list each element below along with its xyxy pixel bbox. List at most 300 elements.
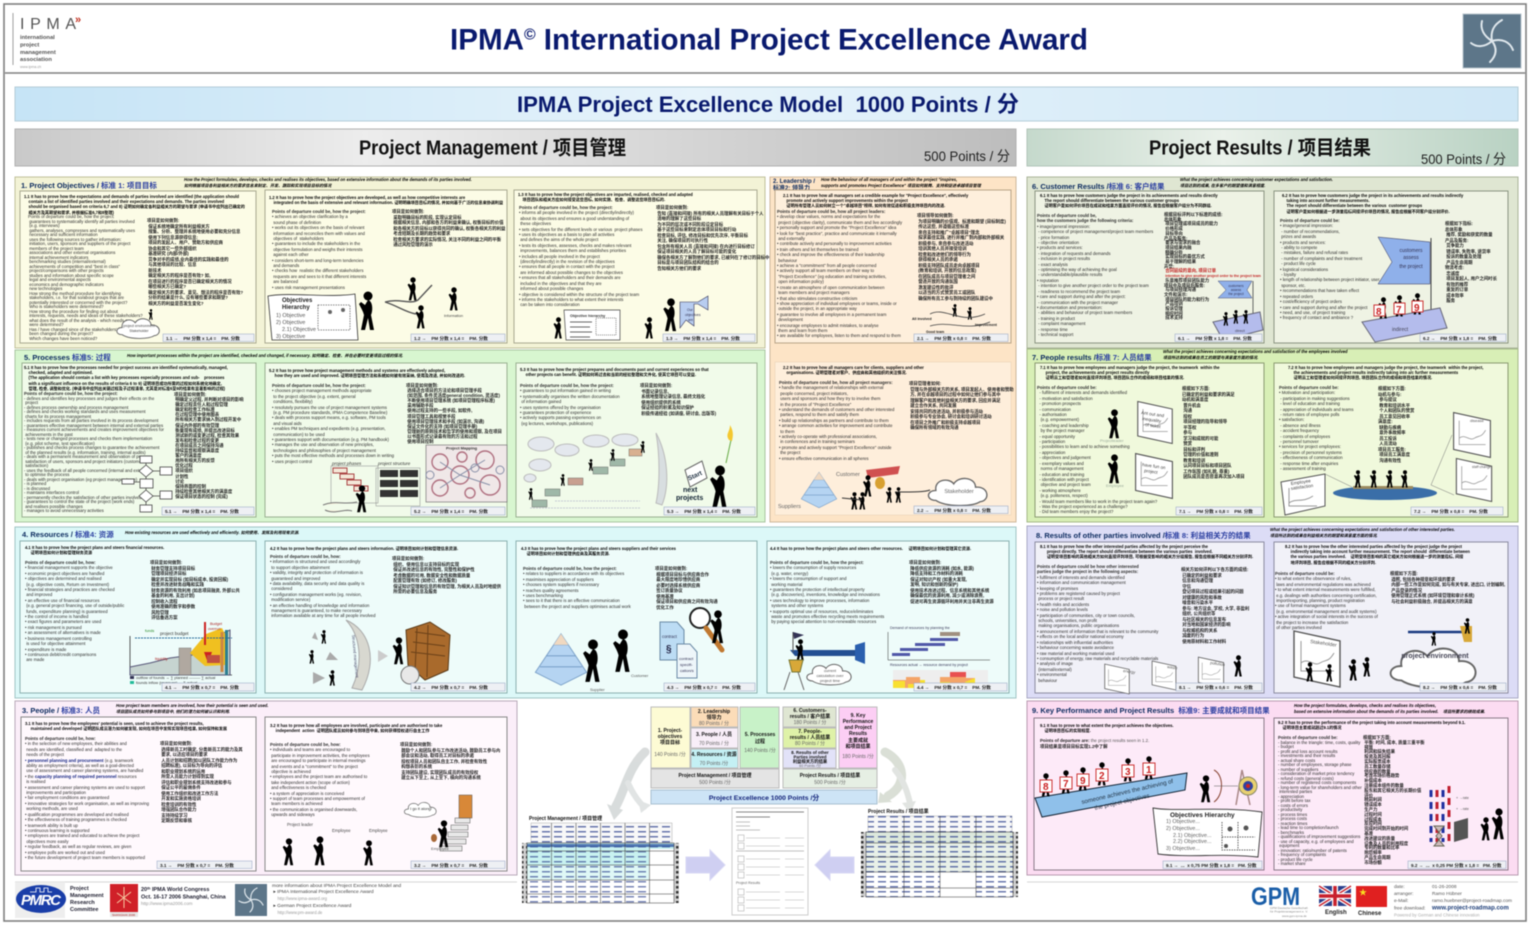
points tag 3.1 bbox=[157, 861, 252, 869]
english points 8.1: Points of departure could be how other interested parties judge the project in the following aspects: • fulfilment of interests and demands identified • information and communication management • keeping of promises • problems are registered caused by project process or project result • health risks and accidents • noise and pollution levels • participation of communities, city or town councils, schools, universities, non profit making organisations, public organisations • announcement of information that is relevant to the community • effects on the local and/or national economy • relationships with influential authorities • behaviour concerning waste avoidance • raw material and working material used • consumption of energy, raw materials and recyclable materials • analysis of image (internal/external) • environmental behaviour bbox=[1037, 564, 1158, 683]
section heading: project management bbox=[15, 129, 1016, 166]
panel: 8 other parties results bbox=[1027, 526, 1518, 698]
panel: 4 resources: 4. Resources / 标准4: 资源 bbox=[22, 529, 114, 539]
points tag 5.1: 5.1 → PM 分数 x 1,4 = PM. 分数 bbox=[165, 508, 239, 515]
illustration: project phases and mind map: project phases bbox=[331, 461, 362, 466]
tile 9 key performance: 和项目结果 bbox=[845, 743, 871, 750]
intro text 8: What the project achieves concerning expectations and satisfaction of other interested parties. 项目所达到的成果在利益相关方的期望和满意度方面的情况. bbox=[1270, 527, 1455, 538]
tile 5 processes bbox=[740, 707, 779, 768]
illustration: handshake, pyramid, contract, magnifier bbox=[535, 608, 723, 692]
chinese points 2.2: 项目管理者如何: 管理与外部相关方的关系, 项目发起人、使用者和赞助 方, 并在卓越项目的过程中如何让他们参与其中 理解客户和其他利益相关方的要求, 回应并满足 建立合作关系, 共同发展 安排共同的改进活动, 并积极参与活动 积极参与专业协会, 研讨会和培训研讨活动 在项目之外推广和积极支持卓越项目 确保所有领域的有效沟通 bbox=[909, 381, 1014, 430]
chinese points 8.2: 根据如下方面: 遵照, 包括各种规章和环境的要求 内部一些工作是如何完成, 如与有关专家, 进出口, 计划编制, 产品登录的情况 使用管理正式系统 (如环境管理和审计系统) 与社会利益积极融合, 并提高相关方的满意 bbox=[1390, 571, 1505, 604]
illustration: boards and rowing team: disease bbox=[1470, 418, 1485, 423]
illustration: customer flag on podium: customers bbox=[1228, 284, 1244, 288]
criterion heading 3.2: 3.2 It has to prove how all employees are involved, participate and are authorised to take independent action 证明团队成员如何参与到项目中来, 如何获得授权进行自主工作 bbox=[270, 723, 442, 733]
logo: PMRC: Management bbox=[70, 893, 104, 899]
logo: IPMA world congress: th bbox=[147, 886, 150, 890]
box 3.2 bbox=[265, 717, 507, 871]
illustration: objectives hierarchy and figures: 2) Objective bbox=[276, 320, 305, 326]
IPMA logo: international bbox=[20, 35, 55, 41]
scoring sheet bbox=[732, 808, 808, 915]
illustration: leadership network: Improvement bbox=[975, 323, 998, 327]
tile 3 people: 70 Points / 分 bbox=[699, 740, 729, 747]
section heading: project results bbox=[1027, 129, 1518, 167]
illustration: next projects, lessons learned: Start bbox=[687, 470, 704, 482]
english points 4.1: Points of departure could be, how: • financial management supports the objective • economic project objectives are handled • objectives are determined and realised (e.g. objective costs, Return on Investment) • financial strategies and practices are checked and improved • an effective use of financial resources (e.g. general project financing, use of outside/public funds, expenditure planning) is guaranteed • the control of income is handled • exact figures and parameters are used • risk management is pursued • an assessment of alternatives is made • business management controlling is used for objective attainment • expenditure is made • continuous debit/credit comparisons are made bbox=[25, 560, 124, 662]
illustration: archer and target bbox=[1200, 770, 1257, 805]
tile 7 people results: 80 Points / 分 bbox=[795, 740, 825, 747]
illustration: customer flag on podium bbox=[1213, 281, 1263, 340]
flag: China: ★ bbox=[1359, 888, 1367, 897]
IPMA logo bbox=[13, 13, 81, 69]
chinese points 9.2: 根据如下方面: 平衡: 时间, 成本, 质量三重平衡 预算 利润和损失结果 投资及其回报 实际股票成本 员工数量存储 供应商的数量 考虑市场价格趋势 补偿成本 注册成本组件的数量 股东和其它相关方的长期价值 评价 税前利润 错误成本 生产力 过程时间 过程成本 反应时间 完成时间到开始的时间 基准 改进建议的质量 设备及人员的利用程度 专利的数量和比率 抱怨频率 产品生命周期 市场份额 bbox=[1363, 735, 1424, 865]
english points 3.1: Points of departure could be, how: • in the selection of new employees, their abilities and needs are identified, classified and adapted to the needs of the project • personnel planning and procurement (e.g. teamwork ability as employment criteria), as well as a goal-directed use of assessment and career planning systems, are handled • the capacity planning of required personnel resources is realised • assessment and career planning systems are used to support improvements and participation • fair employment conditions are guaranteed • innovative strategies for work organisation, as well as improving working methods, are used • qualification programmes are developed and realised • the effectiveness of training programmes is checked • teamwork ability is built up • continuous learning is supported • employees are trained and educated to achieve the project objectives more easily • regular feedback, as well as regular reviews, are given • employee polls are worked out and used • the future development of project team members is supported bbox=[25, 736, 149, 860]
logo: GPM: GPM Deutsche Gesellschaft bbox=[1270, 906, 1308, 910]
box 5.1 bbox=[22, 363, 256, 517]
criterion heading 5.2: 5.2 It has to prove how project management methods and systems are effectively adopted, how they are used and improved. 证明项目管理方法和系统如何被有效采纳, 使用及改进, 并如何改进的. bbox=[269, 368, 465, 378]
points tag 4.3: 4.3 → PM 分数 x 0,7 = PM. 分数 bbox=[667, 684, 741, 691]
tile 4 resources: 70 Points /分 bbox=[700, 760, 728, 767]
illustration: boards and managers: of ticket bbox=[1145, 422, 1162, 429]
illustration: budget chart: overrun bbox=[208, 627, 221, 631]
illustration: indirect flag on podium: customers bbox=[1399, 248, 1423, 254]
chinese points 7.2: 根据如下方面: 动机与参与: 参与提议 教育和培训水平 个人和团队的赞赏 员工意见回收率 满意度: 缺勤与疾病 意外事故频率 员工投诉 人员流动 项目员工服务: 项目员工满意度 沟通有效性 bbox=[1378, 386, 1414, 462]
criterion heading 4.1: 4.1 It has to prove how the project plans and steers financial resources. 证明项目如何计划和管理财务资源 bbox=[25, 545, 164, 555]
points tag 3.2 bbox=[411, 861, 505, 869]
illustration: stakeholder board and project environment cloud: Stakeholder bbox=[1310, 639, 1337, 649]
tile 3 people bbox=[691, 728, 738, 748]
table: project results bbox=[861, 808, 1018, 897]
english points 9.2: Points of departure could be: - balance in the triangle: time, costs, quality - budget - profit and loss account results - investments and their results - actual share costs - number of employees, storage phase - number of suppliers - consideration of market price tendency - refund costs (general costs) - number of registered costs components - long-term value for shareholders and other interested parties - appreciation - profit before tax - costs of errors - productivity - process times - process costs - reaction times - lead time to completion/launch - benchmarks - qualifications of improvement suggestions - use of capacity, e.g. of employees and equipment - innovation: ratio/number of patents - frequency of complaints - product life cycle - market share bbox=[1278, 735, 1362, 866]
illustration: boards and rowing team bbox=[1281, 413, 1492, 515]
criterion heading 5.1: 5.1 It has to prove how the processes needed for project success are identified systematically, managed, checked, adapted and optimised. (The application should contain a list with key processes especially processes and sub- processes with a significant influence on the results of criteria 6 to 9) 证明项目成功所需的过程如何系统化地确定, 管理, 检查, 调整和优化. (申请书中应列出关键过程及子过程清单, 尤其是对标准6至9的结果有显著影响的过程) bbox=[24, 365, 228, 391]
points tag 8.1: 8.1 → PM 分数 x 0,6 = PM. 分数 bbox=[1179, 684, 1253, 691]
logo: IPMA world congress: http://www.ipma2006.com bbox=[141, 901, 193, 906]
points tag 7.2: 7.2 → PM 分数 x 0,8 = PM. 分数 bbox=[1414, 508, 1488, 515]
chinese points 4.2: 项目是如何做到: 组织、使用信息以支持目标的实现 保证并改进信息的有效性, 完整性和保护性 考虑数据的可用, 数据安全性和数据质量 配置管理有效 (如修订, 修改服务) 保证知识管理和信息的有效管理, 为相关人员及时地提供 所需的必要信息及服务 bbox=[392, 556, 501, 594]
tile 2 leadership: 领导力 bbox=[706, 714, 722, 721]
illustration: project environment cloud: Stakeholder bbox=[129, 329, 149, 333]
illustration: next projects, lessons learned bbox=[524, 425, 733, 508]
illustration: stacked bars, hourglass, figures: + →rate bbox=[1456, 796, 1469, 800]
illustration: objectives hierarchy sheet: 2) Objective... bbox=[1166, 826, 1200, 832]
tile 6 customers bbox=[783, 707, 836, 727]
english points 8.2: Points of departure could be: • to what extent the observance of rules, laws and environmental regulations was achieved • to what extent internal measurements were fulfilled, e.g. dealings with authorities concerning certification, import/exporting, planning, product registration • use of formal management systems (e.g. environmental management and audit systems) • active integration of social interests in the success of the project to increase the satisfaction of other parties involved bbox=[1275, 571, 1378, 630]
chinese points 3.2: 项目是如何做到: 鼓励个人和团队参与工作改进活动, 鼓励员工参与内 部会议和活动, 取得员工对目标的承诺 授权项目人员和团队自主工作, 并检查有效性 构想表彰的系统 支持团队建设, 实现团队成员的有效授权 建立从下至上, 从上至下, 横向的沟通系统 bbox=[400, 742, 500, 780]
illustration: project environment cloud: project environment bbox=[123, 324, 155, 328]
box 1.2 bbox=[265, 190, 507, 343]
tile 8 other parties: Parties involved bbox=[794, 754, 827, 760]
tile 8 other parties: 利益相关方的结果 bbox=[793, 758, 828, 765]
box 4.3 bbox=[516, 541, 757, 693]
bar project results: Project Results / 项目结果 bbox=[800, 772, 860, 779]
footer credits: 01-26-2008 bbox=[1432, 884, 1457, 890]
illustration: indirect flag on podium: 8 bbox=[1376, 307, 1382, 318]
footer links text: more information about IPMA Project Excellence Model and ▸ IPMA International Project Excellence Award http://www.ipma-award.org ▸ German Project Excellence Award http://www.pm-award.de bbox=[272, 884, 401, 915]
chinese points 4.1: 项目是如何做到: 财务管理支持项目目标 管理项目经济目标 确定并实现目标 (如目标成本, 投资回报) 检查并改进财务战略和实践 财务资源的有效利用 (如总项目融资, 外部公共 基金的利用, 支出计划) 控制收入流程 使用准确的数字和参数 风险管理 评估备选方案 bbox=[150, 560, 240, 620]
points tag 4.2: 4.2 → PM 分数 x 0,7 = PM. 分数 bbox=[414, 684, 488, 691]
illustration: small boards: waste bbox=[1167, 664, 1179, 671]
points tag 6.1: 6.1 → PM 分数 x 1,8 = PM. 分数 bbox=[1178, 335, 1252, 342]
chinese points 1.2: 项目是如何做到: 采取明确目标的阶段, 实现认定目标 根据相关信息, 内部和各方的利益来确认, 权衡目标的价值 和各相关方的目标以获得共同的确认, 权衡各相关方的利益 考虑短期及长期的趋势和要求 检查相关方要求的实际情况, 关注不同的利益之间的平衡 通过风险管理的演示 bbox=[392, 209, 505, 247]
tile 9 key performance bbox=[839, 707, 877, 768]
tile 9 key performance: Results bbox=[849, 731, 867, 737]
box 1.3 bbox=[514, 190, 757, 343]
tile 8 other parties: 8. Results of other bbox=[791, 750, 829, 755]
points tag 3.1: 3.1 → PM 分数 x 0,7 = PM. 分数 bbox=[160, 862, 234, 869]
illustration: indirect flag on podium: indirect bbox=[1392, 327, 1409, 333]
tile 5 processes: 5. Processes bbox=[745, 732, 776, 738]
chinese points 3.1: 项目是如何做到: 选择新员工时确定, 分类新员工的能力及其 要求, 以适应项目的要求 人员计划和招聘(如以团队工作能力作为 招聘标准), 以目标为导向的评估 和职业规划系统的运用 所需人员能力计划得到实现 评估和职业规划系统支持改进和参与 保证公平的雇佣条件 使用工作组织和改进工作方法 开发和实施资格培训 检查培训的有效性 增强团队合作能力 支持持续学习 定期反馈和审核 bbox=[160, 741, 243, 823]
logo: PMRC: Research bbox=[70, 900, 95, 906]
intro text 7: What the project achieves concerning expectations and satisfaction of the employees involved 项目所达到的成果在员工的期望与满意度方面的情况. bbox=[1163, 349, 1348, 360]
chinese points 5.1: 项目是如何做到: 明确定义过程, 并判断对项目的影响 确定过程责任人和过程管理 确定和检查工作标准 在过程管理中使用图表 所有相关方要求纳入到过程开发中 保证内外部的有效管理 衡量现有成绩, 并提出改进目标 测试新的或变更过程, 检查其效果 发布和检查过程的变更 在项目成员之间保持沟通 持续监督和观察满意度 客户的满意度 用所有相关方的反馈 优化过程 项目组织 计划性 讨论 保持界面的控制 持续检查其他相关方的满意度 保证项目状态的控制 (完成) bbox=[174, 392, 244, 499]
illustration: budget chart: outflow of founds → ∑ planned ——— ∑ actual bbox=[136, 676, 215, 680]
tile 7 people results: results / 人员结果 bbox=[790, 734, 830, 741]
illustration: boards and managers bbox=[1100, 402, 1172, 498]
illustration: archer, document and flag: Objective hierarchy bbox=[570, 314, 606, 318]
logo: PMRC: Project bbox=[70, 886, 89, 892]
points tag 6.2: 6.2 → PM 分数 x 1,8 = PM. 分数 bbox=[1423, 335, 1497, 342]
criterion heading 6.1: 6.1 It has to prove how customers judge the project in its achievements and results directly The report should differentiate between the various customer groups 证明客户是如何评价项目在成就和结果方面直接评价的情况, 报告应根据客户组分为不同群组. bbox=[1040, 193, 1218, 208]
english points 1.3: Points of departure could be, how the project: • informs all people involved in the project (directly/indirectly) about its objectives and ensures a good understanding of these objectives • sets objectives for the different levels or various project phases • uses its objectives as a basis to plan all activities and defines the aims of the whole project • tests its objectives, assesses, checks and makes relevant improvements, balances them and establishes priorities • includes all people involved in the project (directly/indirectly) in the revision of the objectives • ensures that all people in contact with the project are informed about possible changes to the objectives • ensures that all stakeholders and their demands are included in the objectives and that they are informed about possible changes • objective is considered within the structure of the project team • informs the stakeholders to what extent their interests can be taken into consideration bbox=[519, 205, 642, 307]
illustration: objectives hierarchy and figures bbox=[268, 277, 463, 340]
illustration: objectives hierarchy sheet: 2.1) Objective... bbox=[1173, 833, 1212, 839]
illustration: telescope and resource chart: calculation over bbox=[816, 673, 844, 678]
english points 4.4: Points of departure could be, how the project: • lowers the consumption of supply resources (e.g. water, energy) • lowers the consumption of support and working material • guarantees the protection of intellectual property (e.g. discoveries), inventions, knowledge and innovations • uses technology to improve processes, information systems and other systems • supports optimal use of resources, reduce/eliminates waste and promotes effective recycling meets requirements by paying special attention to non-renewable resources bbox=[770, 560, 884, 624]
logo: PMRC: Committee bbox=[70, 907, 98, 913]
criterion heading 9.1: 9.1 It has to prove to what extent the project achieves the objectives. 证明项目目标的实现程度. bbox=[1040, 723, 1174, 733]
chinese points 5.2: 项目是如何做到: 选择适合项目的方法论和项目管理手段 (如范围, 条件灵活度general condition, 灵活度) 不断使用项目管理系统 (如项目管理程序标准) 采用辅助手段 使用过程支持的一些手段, 如软件, 项目管理工具和视觉手段 使用项目管理技术和手段 (如演示, 沟通) 保证文件化的支持 (如项目管理手册) 管理新的原则技术和哲学的使用和观察, 及在项目 以书面形式记录最有效的方法和过程 使用项目控制 bbox=[406, 383, 502, 444]
footer credits: e-Mail: bbox=[1394, 898, 1408, 904]
illustration: relay runners and stairs: Project leader bbox=[287, 822, 313, 827]
footer credits: date: bbox=[1394, 884, 1405, 890]
points tag 7.2 bbox=[1411, 507, 1503, 515]
chinese points 2.1: 项目领导如何做到: 为项目明确的价值观、标准和期望 (目标制度) 传达这些, 并遵循这些标准 亲自支持和推广"卓越项目"理念 探求最佳实践, 进行并推广到内部和外部相关 积极参与, 亲自参与改进活动 培训其他人员并接受培训 检查和改进他们的领导行为 获得相关人员的承诺 积极支持团队成员走向卓越项目 (教育和培训, 开放的信息政策) 在团队成员与项目管理者之间 营造开放的沟通氛围 激发建设性的批评 以适当的方式赞赏员工或团队 确保所有员工参与到持续的团队建设中 bbox=[917, 213, 1006, 300]
chinese points 8.1: 相关方如何评判以下各方面的成绩: 已确定的利益和要求 信息和沟通管理 守信 登记项目过程或结果引起的问题 对健康的风险和事故 噪音和污染水平 参与: 地方议会, 学校, 大学, 非盈利 组织, 公共组织等 与社区相关的信息发布 对当地和国家经济的影响 与权威机构的关系 减废的行为 使用原材料和工作材料 bbox=[1181, 567, 1249, 644]
footer credits bbox=[1394, 884, 1512, 918]
tile 9 key performance: and Project bbox=[844, 725, 872, 731]
box 7.1 bbox=[1035, 363, 1264, 517]
flag: China bbox=[1356, 886, 1387, 917]
illustration: objectives hierarchy sheet: 2.2) Objective... bbox=[1173, 839, 1212, 845]
illustration: budget chart bbox=[130, 622, 232, 685]
criterion heading 3.1: 3.1 It has to prove how the employees' potential is seen, used to achieve the project results, maintained and developed 证明团队成员潜力如何被发现, 如何在项目中发挥实现项目结果, 如何保持和发展 bbox=[25, 721, 227, 731]
bar project excellence: Project Excellence 1000 Points /分 bbox=[709, 793, 819, 802]
illustration: customer flag on podium: the project bbox=[1228, 292, 1244, 296]
illustration: boards and managers: Employee bbox=[1106, 483, 1125, 488]
panel: 3 people bbox=[15, 701, 517, 875]
tile 2 leadership bbox=[691, 707, 738, 727]
points tag 8.2: 8.2 → PM 分数 x 0,6 = PM. 分数 bbox=[1423, 684, 1497, 691]
tile 1 project objectives: 1. Project- bbox=[658, 728, 682, 734]
footer rule left bbox=[15, 881, 1518, 883]
illustration: project phases and mind map: project structure bbox=[377, 461, 411, 466]
tile 1 project objectives: objectives bbox=[658, 734, 682, 740]
box 9.1 bbox=[1034, 718, 1264, 870]
icon: award spiral small bbox=[235, 884, 267, 916]
flag: United Kingdom: English bbox=[1325, 910, 1347, 916]
logo: IPMA world congress: IPMA World Congress bbox=[150, 887, 209, 893]
points tag 5.2: 5.2 → PM 分数 x 1,4 = PM. 分数 bbox=[414, 508, 488, 515]
logo: PMRC: PMRC bbox=[21, 892, 62, 909]
banner: model 1000 points bbox=[15, 87, 1518, 121]
illustration: relay runners and stairs: Employee bbox=[332, 828, 351, 833]
illustration: handshake, pyramid, contract, magnifier: specifi- bbox=[680, 662, 693, 667]
tile 4 resources: 4. Resources / 资源 bbox=[691, 751, 737, 758]
points tag 9.1: 9.1 → ... x 0,75 PM 分数 x 1,8 = PM. 分数 bbox=[1166, 862, 1257, 869]
IPMA logo: association bbox=[20, 57, 52, 63]
points tag 8.2 bbox=[1420, 683, 1506, 691]
box 4.2 bbox=[265, 541, 507, 693]
illustration: indirect flag on podium: assess bbox=[1403, 255, 1419, 261]
tile 3 people: 3. People / 人员 bbox=[696, 731, 732, 738]
points tag 5.1 bbox=[162, 507, 254, 515]
logo: IPMA world congress: SHANGHAI 2006 bbox=[112, 913, 136, 917]
illustration: blue bar with numbered figures: 3 bbox=[1125, 767, 1131, 778]
tile 6 customers: 180 Points / 分 bbox=[794, 719, 826, 726]
points tag 4.1: 4.1 → PM 分数 x 0,7 = PM. 分数 bbox=[165, 684, 239, 691]
illustration: blue bar with numbered figures: 8 bbox=[1043, 782, 1049, 793]
table: project management: Project Management / 项目管理 bbox=[529, 815, 602, 822]
intro text 5: How important processes within the project are identified, checked and changed, if necessary. 如何确定、检查、并在必要时变更项目过程的情况. bbox=[127, 353, 403, 358]
illustration: boards and managers: project bbox=[1144, 468, 1159, 475]
points tag 8.1 bbox=[1176, 683, 1262, 691]
points tag 9.1 bbox=[1163, 861, 1262, 869]
intro text 3: How project team members are involved, how their potential is seen and used. 项目团队成员如何参与到项目中, 他们的潜力如何被认识和利用. bbox=[116, 703, 268, 714]
illustration: budget chart: liquidity bbox=[155, 657, 168, 661]
tile 9 key performance: 180 Points /分 bbox=[842, 753, 874, 760]
panel: 4 resources bbox=[15, 527, 1016, 698]
tile 1 project objectives bbox=[651, 707, 690, 768]
illustration: relay runners and stairs: Employee bbox=[369, 828, 388, 833]
illustration: objectives hierarchy sheet: 1) Objective... bbox=[1166, 819, 1200, 825]
english points 7.2: Points of departure could be: • Motivation and participation: - participation in making suggestions - level of education and training - appreciation of individuals and teams - return rates of employee polls • satisfaction: - absence and illness - accident frequency - complaints of employees - personnel turnover • services for project employees: - precision of personnel systems - effectiveness of communication - response time after enquiries - assessment of training bbox=[1279, 385, 1354, 471]
bar project management: 500 Points /分 bbox=[699, 779, 731, 786]
tile 9 key performance: Performance bbox=[843, 719, 873, 725]
illustration: objectives hierarchy and figures: 1) Objective bbox=[276, 313, 305, 319]
intro text 2: How the behaviour of all managers of and within the project "inspires, supports and promotes Project Excellence" 项目如何鼓舞、支持和促进卓越项目管理 bbox=[821, 177, 981, 188]
arrow: right to scoring sheet bbox=[686, 850, 725, 880]
criterion heading 9.2: 9.2 It has to prove the performance of the project taking into account measurements beyond 9.1. 证明项目主要成就超过9.1的情况 bbox=[1278, 720, 1465, 730]
bar project management bbox=[651, 769, 779, 788]
illustration: objectives hierarchy and figures: Hierarchy bbox=[282, 305, 310, 311]
illustration: archer, document and flag: are bbox=[688, 318, 693, 322]
illustration: archer, document and flag bbox=[554, 296, 708, 340]
illustration: handshake, pyramid, contract, magnifier: Customer bbox=[631, 673, 649, 678]
icon: award spiral logo bbox=[1463, 14, 1521, 68]
english points 4.3: Points of departure could be, how the project: • relates to suppliers in accordance with its objectives • maximises appreciation of suppliers • chooses system suppliers if necessary • reaches quality agreements • uses benchmarking • sees to it that there is an effective communication between the project and suppliers optimises actual work bbox=[523, 566, 631, 609]
box 4.4 bbox=[767, 541, 1009, 693]
illustration: suppliers pyramid and stakeholder cloud: Suppliers bbox=[778, 504, 801, 510]
footer credits: arranger: bbox=[1394, 891, 1413, 897]
tile 5 processes: 140 Points /分 bbox=[744, 747, 776, 754]
illustration: boards and managers: Projectleader bbox=[1100, 438, 1124, 443]
illustration: archer, document and flag: objectives bbox=[685, 313, 701, 317]
box 2.1 bbox=[775, 190, 1011, 343]
illustration: leadership network bbox=[912, 304, 998, 334]
illustration: boards and rowing team: satisfaction bbox=[1290, 483, 1314, 491]
tile 1 project objectives: 项目目标 bbox=[660, 739, 680, 746]
illustration: handshake, pyramid, contract, magnifier: contract bbox=[679, 656, 694, 661]
illustration: objectives hierarchy and figures: 3) Objective bbox=[276, 334, 305, 340]
chinese points 4.4: 项目是如何做到: 降低供应资源的消耗 (如水, 能源) 降低支持和工作材料的消耗 保证对知识产权 (如重大发现, 发明, 知识和创新的保护) 使用技术改进过程、信息系统和其他系统 确保最优的资源利用, 减少或消除浪费, 促进可再生资源循环利用并关注非再生资源 bbox=[909, 560, 994, 604]
intro text 9: How the project formulates, develops, checks and realises its objectives, based on extensive information about the demands of its parties involved. 项目所要求的绩效成果. bbox=[1294, 703, 1485, 714]
footer credits: www.project-roadmap.com bbox=[1431, 906, 1509, 912]
tile 6 customers: results / 客户结果 bbox=[790, 713, 830, 720]
flag: China: Chinese bbox=[1358, 911, 1382, 917]
title: International Project Excellence Award bbox=[536, 24, 1088, 56]
box 1.1 bbox=[20, 191, 256, 343]
points tag 4.4: 4.4 → PM 分数 x 0,7 = PM. 分数 bbox=[917, 684, 991, 691]
illustration: blue bar with numbered figures: 1 bbox=[1146, 765, 1152, 776]
chinese points 6.2: 根据如下指标: 总体形象 推荐, 奖励和获奖的数量 产品及服务: 竞争能力 错误率, 失败率, 退货率 投诉的数量及处理 产品生命周期 物流考虑: 忠诚度 项目发起人, 用户之间时长 有效的推荐 重复的订单 成本效率 服务 bbox=[1445, 221, 1497, 303]
illustration: project environment cloud bbox=[117, 309, 159, 338]
illustration: handshake, pyramid, contract, magnifier: § bbox=[666, 644, 672, 655]
points tag 1.2: 1.2 → PM 分数 x 1,4 = PM. 分数 bbox=[414, 335, 488, 342]
panel: 2 leadership: 2. Leadership / bbox=[773, 179, 815, 185]
illustration: small boards: energy bbox=[1123, 668, 1136, 675]
illustration: handshake, pyramid, contract, magnifier: Supplier bbox=[590, 687, 605, 692]
illustration: blue bar with numbered figures: 7 bbox=[1063, 779, 1069, 790]
box 3.1 bbox=[21, 717, 256, 871]
illustration: leadership network: Good team bbox=[926, 330, 944, 334]
IPMA logo: management bbox=[20, 50, 56, 56]
illustration: indirect flag on podium: the project bbox=[1399, 264, 1423, 270]
IPMA logo: www.ipma.ch bbox=[20, 65, 41, 69]
english points 4.2: Points of departure could be, how: • information is structured and used accordingly to support objective attainment • validity, integrity and protection of information is guaranteed and improved • data availability, data security and data quality is considered • configuration management works (eg. revision, modification service) • an effective handling of knowledge and information management is guaranteed, to make necessary information available at any time for all people involved bbox=[270, 554, 376, 618]
footer credits: free download: bbox=[1394, 906, 1425, 912]
illustration: information structure and shelf bbox=[309, 620, 450, 690]
illustration: objectives hierarchy sheet: Objectives Hierarchy bbox=[1170, 812, 1235, 819]
criterion heading 4.2: 4.2 It has to prove how the project plans and steers information. 证明项目如何计划和管理信息资源. bbox=[270, 546, 458, 551]
chinese points 7.1: 根据如下方面: 已确定的利益和要求的满足 动机和满意度 晋升机会 沟通 授权 项目经理的指导和领导 平等权 参与 学习和成就的可能 赞赏 目标和评判 管理的价值和准则 教育和培训 认同项目目标和项目团队 工作氛围 (如礼貌, 尊重) 团队成员是否愿意再次加入项目 bbox=[1182, 386, 1245, 479]
illustration: blue bar with numbered figures: someone achieves the achieving of bbox=[1081, 779, 1174, 806]
points tag 1.2 bbox=[411, 334, 505, 342]
points tag 4.4 bbox=[914, 683, 1007, 691]
criterion heading 7.2: 7.2 It has to prove how employees and managers judge the project, the teamwork within the project, the achievements and project results indirectly taking into a/c further measurements 证明员工和管理者如何间接评判项目, 项目团队合作的成绩和项目结果的情况. bbox=[1288, 365, 1483, 380]
illustration: budget chart: founds inflow (revenues) → ∑ actual bbox=[136, 681, 197, 685]
tile 2 leadership: 80 Points / 分 bbox=[699, 720, 729, 727]
illustration: objectives hierarchy and figures: Information bbox=[444, 314, 463, 318]
illustration: stacked bars, hourglass, figures: + →rate bbox=[1456, 807, 1469, 811]
english points 5.1: Points of departure could be, how the project: - defines and identifies key processes and judges their effects on the project - defines process ownership and process management - defines and checks working standards and uses measurement charts for its process management - includes requests from all parties involved in its process development - guarantees effective management between internal and external parties - measures current achievements and creates improvement objectives for achievements in the past - tests new or changed processes and checks them implementation (e.g. pilot scheme, test specification) - publishes and checks process changes to guarantee the achievement of the planned results (e.g. information, training, internal audits) - deals with a permanent measurement and observation of process satisfaction of users, sponsors and project initiators (customer satisfaction) - uses the feedback of all people concerned (internal and external) to optimise the process - deals with project organisation (eg project manager, team) - is planned - is discussed - maintains interfaces control - permanently checks the satisfaction of other parties involved - guarantees to control the state of the project (work ends) and realises possible changes - manages to avoid unnecessary activities bbox=[24, 391, 164, 513]
illustration: small boards bbox=[1105, 655, 1242, 694]
section heading: project results: 500 Points / 分 bbox=[1421, 151, 1506, 167]
intro text 6: What the project achieves concerning customer expectations and satisfaction. 项目达到的成果, 在多客户的期望值和满意程度. bbox=[1180, 177, 1333, 188]
points tag 2.2 bbox=[914, 506, 1008, 514]
points tag 3.2: 3.2 → PM 分数 x 0,7 = PM. 分数 bbox=[414, 862, 488, 869]
english points 7.1: Points of departure could be: - fulfilment of interests and demands identified - motivation and satisfaction - promotion prospects - communication - authorisation (e.g. empowerment) - coaching and leadership by the project manager - equal opportunity - participation - possibilities to learn and to achieve something - appreciation - objectives and judgement - exemplary values and norms of management - education and training - identification with project objective and project team - working atmosphere (e.g. politeness, respect) - Would team members like to work in the project team again? - Was the project experienced as a challenge? - Did team members enjoy the project? bbox=[1037, 385, 1157, 514]
illustration: indirect flag on podium: 9 bbox=[1414, 303, 1420, 314]
panel: 5 processes: 5. Processes 标准5: 过程 bbox=[24, 352, 111, 362]
illustration: relay runners and stairs: Employee bbox=[431, 846, 450, 851]
scoring sheet: Project Results bbox=[736, 881, 760, 885]
footer credits: Ramo Hübner bbox=[1432, 891, 1462, 897]
tile 4 resources bbox=[691, 749, 738, 768]
footer credits: ramo.huebner@project-roadmap.com bbox=[1432, 898, 1512, 904]
box 6.1 bbox=[1035, 191, 1264, 343]
IPMA logo: » bbox=[75, 14, 81, 26]
panel: 8 other parties results: 8. Results of other parties involved /标准 8: 利益相关方的结果 bbox=[1036, 530, 1251, 540]
section heading: project results: Project Results / 项目结果 bbox=[1149, 136, 1371, 160]
logo: PMRC bbox=[15, 882, 104, 918]
bar project management: Project Management / 项目管理 bbox=[678, 772, 752, 779]
criterion heading 4.3: 4.3 It has to prove how the project plans and steers suppliers and their services 证明项目如何计划和管理供应商及其服务资源. bbox=[521, 546, 676, 556]
panel: 1 project objectives bbox=[15, 177, 765, 348]
bar project results bbox=[783, 769, 877, 788]
points tag 7.1 bbox=[1176, 507, 1262, 515]
illustration: relay runners and stairs bbox=[283, 795, 472, 865]
box 2.2 bbox=[775, 362, 1011, 515]
bar project results: 500 Points /分 bbox=[814, 779, 846, 786]
points tag 6.2 bbox=[1420, 334, 1506, 342]
english points 3.2: Points of departure could be, how: • individuals and teams are encouraged to participate in improvement activities, the employees are encouraged to participate in internal meetings and events and a "commitment" to the project objective is achieved • employees and the project team are authorised to take independent action (scope of action) and effectiveness is checked • a system of appreciation is conceived • support of team processes and empowerment of team members is achieved • the communication is organised downwards, upwards and sideways bbox=[270, 742, 370, 817]
central model diagram bbox=[522, 707, 1018, 915]
logo: GPM: für Projektmanagement e. V. bbox=[1270, 910, 1308, 914]
intro text 1: How the Project formulates, develops, checks and realises its objectives, based on extensive information about the demands of its parties involved. 如何根据项目各利益相关方的需求信息来制定、开发、跟踪和实现项目目标的情况 bbox=[184, 177, 472, 188]
criterion heading 1.3: 1.3 It has to prove how the project objectives are imparted, realised, checked and adapted 项目团队和相关方应如何接受这些目标, 如何实施、检查、调整这些项目目标的. bbox=[518, 192, 693, 202]
illustration: telescope and resource chart bbox=[784, 626, 990, 690]
points tag 1.1: 1.1 → PM 分数 x 1,4 = PM. 分数 bbox=[166, 335, 240, 342]
chinese points 1.3: 项目是如何做到: 告知 (直接和间接) 所有的相关人员理解有关目标于个人 清晰的理解了这些目标 为不同的层次或不同阶段设定目标 基于这些目标来制定总体项目目标和行动 检查目标, 评估, 修改目标和优先次序, 平衡目标 关注, 确保项目的可执行性 包含所有相关人员 (直接和间接) 在内进行目标修订 保证项目相关的人员了解目标可能的变化 确保各相关方了解到他们的要求, 已被列在了修订的目标中 目标是与项目团队结构的结合的 告知相关方他们的要求 bbox=[656, 205, 769, 270]
illustration: suppliers pyramid and stakeholder cloud: Customer bbox=[836, 472, 860, 478]
points tag 2.1: 2.1 → PM 分数 x 0,8 = PM. 分数 bbox=[917, 335, 991, 342]
illustration: handshake, pyramid, contract, magnifier: cation/s bbox=[680, 668, 694, 673]
table: project results: Project Results / 项目结果 bbox=[868, 808, 929, 815]
illustration: indirect flag on podium bbox=[1362, 237, 1447, 342]
panel: 3 people: 3. People / 标准3: 人员 bbox=[22, 705, 100, 715]
illustration: stacked bars, hourglass, figures bbox=[1431, 786, 1504, 846]
points tag 4.1 bbox=[162, 683, 254, 691]
english points 2.1: Points of departure could be, how all project leaders: • develop clear values, norms and expectations for the project (objective clarity), communicate them and live accordingly • personally support and promote the "Project Excellence" idea • look for "best practice", practice and communicate it internally and externally • contribute actively and personally to improvement activities • train others and let themselves be trained • check and improve the effectiveness of their leadership behaviour • achieve a "commitment" from all people concerned • actively support all team members on their way to "Project Excellence" (eg education and training activities, open information policy) • create an atmosphere of open communication between team members and project managers • that also stimulates constructive criticism • show appreciation of individual employees or teams, inside or outside the project, in an appropriate way • guarantee to involve all employees in a permanent team development • encourage employees to admit mistakes, to analyse them and learn from them • are available for employees, listen to them and respond to them bbox=[777, 209, 902, 338]
illustration: telescope and resource chart: current bbox=[824, 668, 837, 673]
illustration: project phases and mind map: Project Mapping bbox=[446, 446, 478, 450]
illustration: flow chart bbox=[122, 456, 172, 512]
criterion heading 8.2: 8.2 It has to prove how the other interested parties affected by the project judge the project indirectly taking into account further measurement. The report should differentiate between the various parties involved. 证明受项目影响的其它相关方如何根据进一步的测量指标, 间接 地评判项目, 报告应根据不同的相关方分别评判. bbox=[1285, 544, 1470, 565]
logo: IPMA world congress bbox=[110, 884, 227, 917]
illustration: stakeholder board and project environment cloud bbox=[1294, 618, 1476, 688]
points tag 1.3 bbox=[663, 334, 755, 342]
illustration: archer, document and flag: Our bbox=[687, 308, 694, 312]
footer credits: Powered by German and Chinese innovation bbox=[1394, 912, 1480, 918]
illustration: stakeholder board and project environment cloud: project environment bbox=[1401, 653, 1469, 660]
logo: IPMA world congress: 20 bbox=[141, 887, 147, 893]
panel: 7 people results: 7. People results /标准 7: 人员结果 bbox=[1032, 352, 1152, 362]
illustration: leadership network: All involved bbox=[912, 317, 932, 321]
illustration: objectives hierarchy sheet: 3) Objective... bbox=[1166, 846, 1200, 852]
illustration: customer flag on podium: assess bbox=[1231, 288, 1241, 292]
panel: 6 customer results bbox=[1027, 177, 1518, 348]
chinese points 4.3: 项目是如何做到: 根据项目目标与供应商合作 最大限度地珍惜供应商 必要时选择系统供应商 签订质量协议 使用基准 保证项目和供应商之间有效沟通 优化工作 bbox=[655, 566, 718, 610]
illustration: blue bar with numbered figures bbox=[1035, 756, 1187, 817]
criterion heading 6.2: 6.2 It has to prove how customers judge the project in its achievements and results indirectly taking into account further measurements. The report should differentiate between the various customer groups 证明客户是如何根据进一步测量指标间接评价项目的情况, 报告应根据不同客户组分别评价. bbox=[1282, 193, 1463, 214]
illustration: telescope and resource chart: Resources actual ↔ resource demand by project bbox=[890, 663, 968, 667]
panel: 6 customer results: 6. Customer Results /标准 6: 客户结果 bbox=[1032, 181, 1165, 191]
illustration: boards and rowing team: Employee bbox=[1290, 478, 1311, 486]
text: points of departure 9.1: Points of departure are: the project results seen in 1.2. 项目结果是项目目标实现1.2中了解 bbox=[1040, 738, 1149, 748]
section heading: project management: Project Management / 项目管理 bbox=[359, 136, 626, 160]
panel: 5 processes bbox=[15, 350, 765, 522]
illustration: small boards: pollution bbox=[1210, 660, 1225, 667]
banner: model 1000 points: IPMA Project Excellence Model 1000 Points / 分 bbox=[517, 92, 1019, 117]
english points 2.2: Points of departure could be, how all project managers: • handle the management of relationships with external people concerned, project initiators, users and sponsors and how they try to involve them in the process of "Project Excellence" • understand the demands of customers and other interested parties, respond to them and satisfy them • build up relationships as partners and contribute to them • arrange common activities for improvement and contribute to them • actively co-operate with professional associations, in conferences and in training seminars • promote and actively support "Project Excellence" outside the project • ensure effective communication in all spheres bbox=[779, 380, 894, 461]
illustration: telescope and resource chart: project time bbox=[820, 678, 840, 683]
section heading: project management: 500 Points / 分 bbox=[924, 148, 1010, 164]
tile 7 people results bbox=[783, 728, 836, 748]
box 5.2 bbox=[265, 363, 507, 517]
panel: 9 key performance and project results bbox=[1027, 701, 1518, 875]
